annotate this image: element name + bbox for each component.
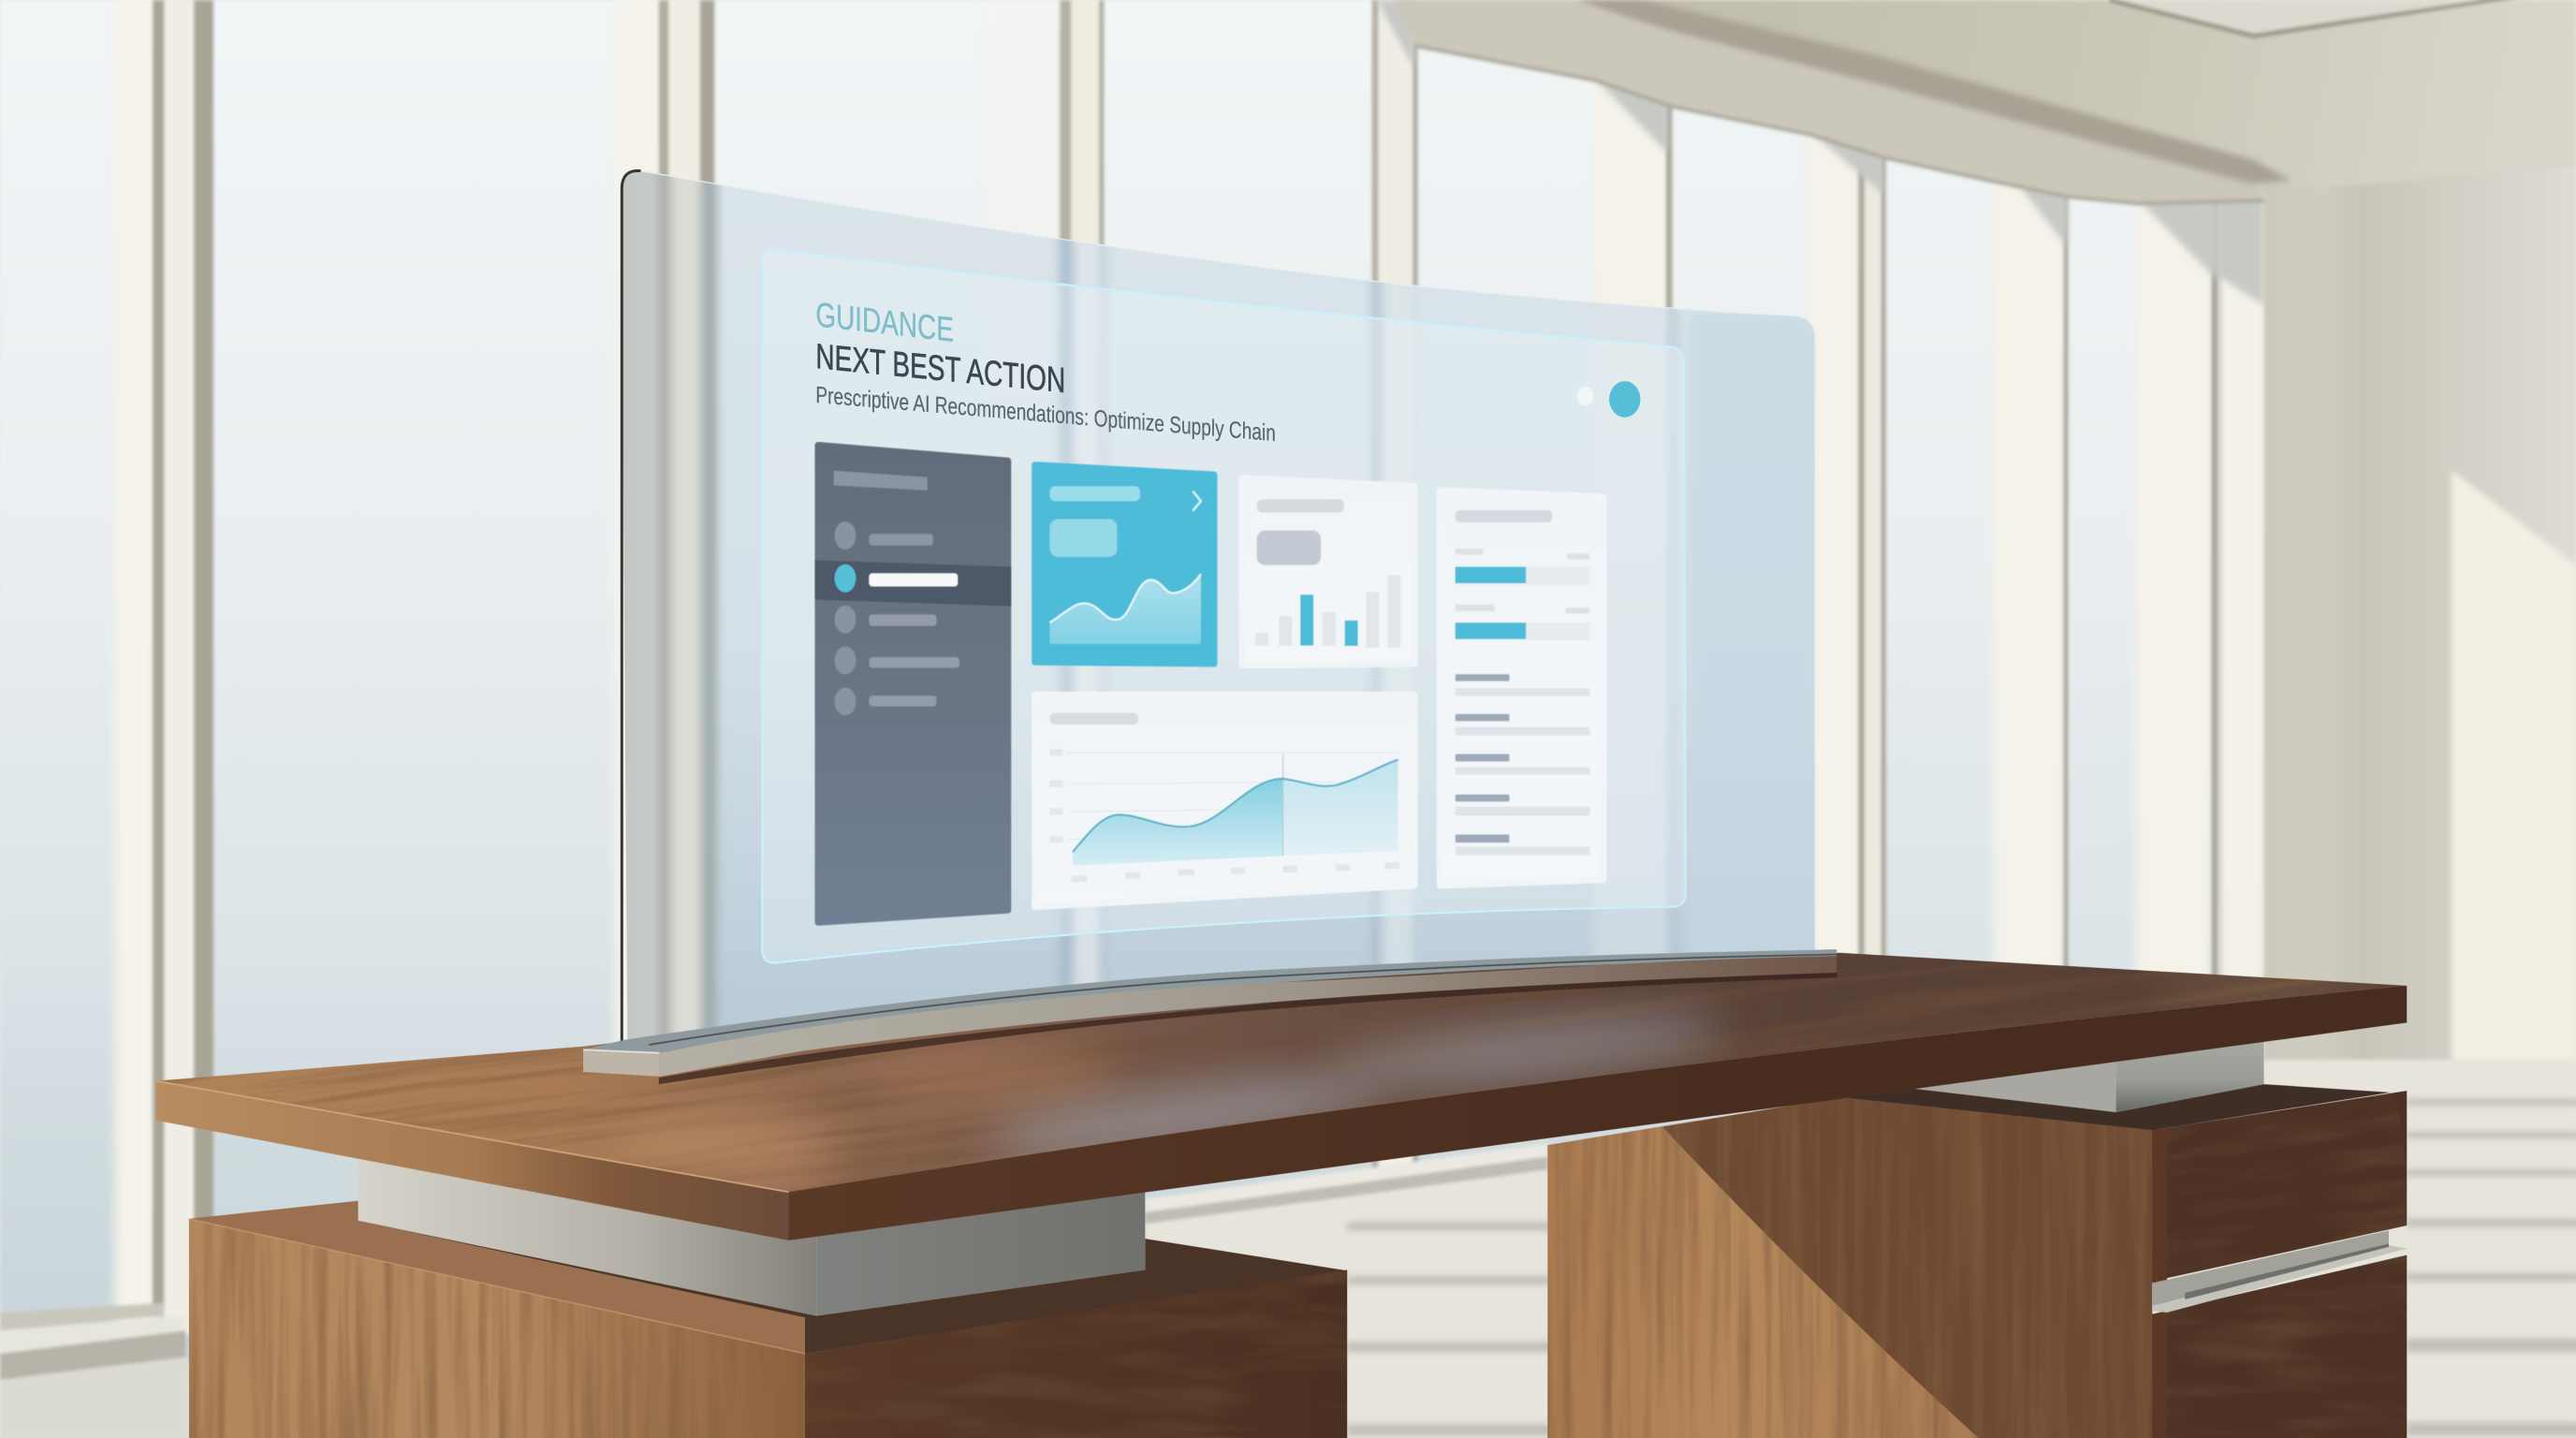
pedestal top	[189, 1201, 1347, 1354]
pedestal grain	[1547, 1084, 2152, 1438]
rear channel dark line	[649, 954, 1837, 1045]
card value box	[1050, 519, 1117, 557]
nav item 2 active	[835, 565, 958, 593]
bars	[1255, 576, 1400, 648]
sunlight patch on wall	[2452, 470, 2576, 1062]
fascia dark band	[1577, 0, 2291, 184]
shaded frame wedges	[1377, 0, 2264, 305]
teal area chart	[1050, 574, 1201, 644]
glass display panel	[621, 148, 1821, 1068]
nav item 5	[835, 687, 936, 715]
base rear channel	[583, 949, 1837, 1053]
dark ledge	[1840, 1084, 2391, 1130]
window sill right	[1145, 1143, 1547, 1224]
desk left edge	[156, 1081, 788, 1240]
fascia band light strip	[1393, 0, 2264, 204]
nav item 1	[835, 521, 933, 550]
card title bar	[1050, 486, 1140, 501]
metal support right	[1889, 1032, 2264, 1112]
base shadow	[659, 973, 1837, 1084]
glass top highlight	[640, 170, 1815, 961]
line chart card	[1035, 695, 1414, 907]
desk front edge	[788, 986, 2407, 1240]
pedestal top warm side	[189, 1201, 805, 1354]
upper drawer	[2152, 1091, 2407, 1282]
card title bar	[1050, 713, 1138, 725]
drawer side strips	[2152, 1128, 2167, 1438]
progress row 2	[1456, 605, 1590, 639]
block top highlight	[583, 1049, 660, 1053]
list rows	[1456, 674, 1590, 855]
heading block	[815, 295, 1276, 447]
nav item 3	[835, 606, 936, 633]
reflected mullions in glass	[621, 148, 1821, 1068]
pedestal front face	[189, 1219, 805, 1438]
floor shadow stripes	[1347, 1099, 2576, 1436]
window frames	[153, 0, 2223, 1334]
axis labels	[1050, 749, 1399, 882]
floor	[1145, 1060, 2576, 1438]
desk surface	[156, 953, 2407, 1192]
nav item 4	[835, 646, 959, 674]
display base	[583, 949, 1837, 1084]
pedestal edge line	[189, 1219, 805, 1354]
recess interior	[2119, 0, 2481, 33]
floor bottom-left	[0, 1357, 189, 1438]
card title bar	[1456, 510, 1552, 522]
active row highlight	[815, 560, 1011, 606]
grid lines	[1068, 753, 1399, 840]
ceiling	[1393, 0, 2576, 204]
glass pane	[621, 170, 1815, 1045]
sidebar panel	[815, 446, 1011, 922]
pane top shadow line	[1416, 46, 2264, 204]
subtitle: Prescriptive AI Recommendations: Optimize Supply Chain	[815, 382, 1276, 447]
surface grain and reflections	[161, 972, 2351, 1189]
eyebrow text: GUIDANCE	[815, 295, 954, 349]
base end block	[583, 1049, 660, 1077]
lower drawer	[2152, 1255, 2407, 1438]
curved metal strip	[660, 956, 1837, 1077]
warm sunlit strips on glass	[115, 0, 2264, 1330]
screen outline	[762, 250, 1686, 962]
window sill left	[0, 1302, 185, 1380]
main title: NEXT BEST ACTION	[815, 337, 1065, 401]
status dots	[1577, 381, 1640, 418]
desk left pedestal	[189, 1158, 1347, 1438]
desk right pedestal	[1547, 1032, 2421, 1438]
chevron icon	[1193, 492, 1201, 511]
metal drawer handle	[2152, 1230, 2407, 1313]
metal support left	[359, 1158, 1145, 1316]
card title bar	[1257, 499, 1344, 512]
bar chart card	[1242, 478, 1414, 666]
details list card	[1440, 491, 1603, 886]
progress row 1	[1456, 549, 1590, 585]
pedestal side face	[805, 1269, 1347, 1438]
wall	[2264, 164, 2576, 1068]
sidebar header bar	[835, 472, 927, 490]
area chart	[1073, 754, 1398, 866]
glass edge	[622, 170, 640, 1041]
teal KPI card	[1035, 465, 1214, 664]
card value box	[1257, 531, 1321, 565]
pedestal front face	[1547, 1097, 2152, 1438]
shadow on pedestal	[1662, 1097, 2152, 1438]
ceiling recess line	[2110, 0, 2576, 37]
desk top	[155, 953, 2408, 1240]
edge highlight	[156, 1081, 788, 1192]
